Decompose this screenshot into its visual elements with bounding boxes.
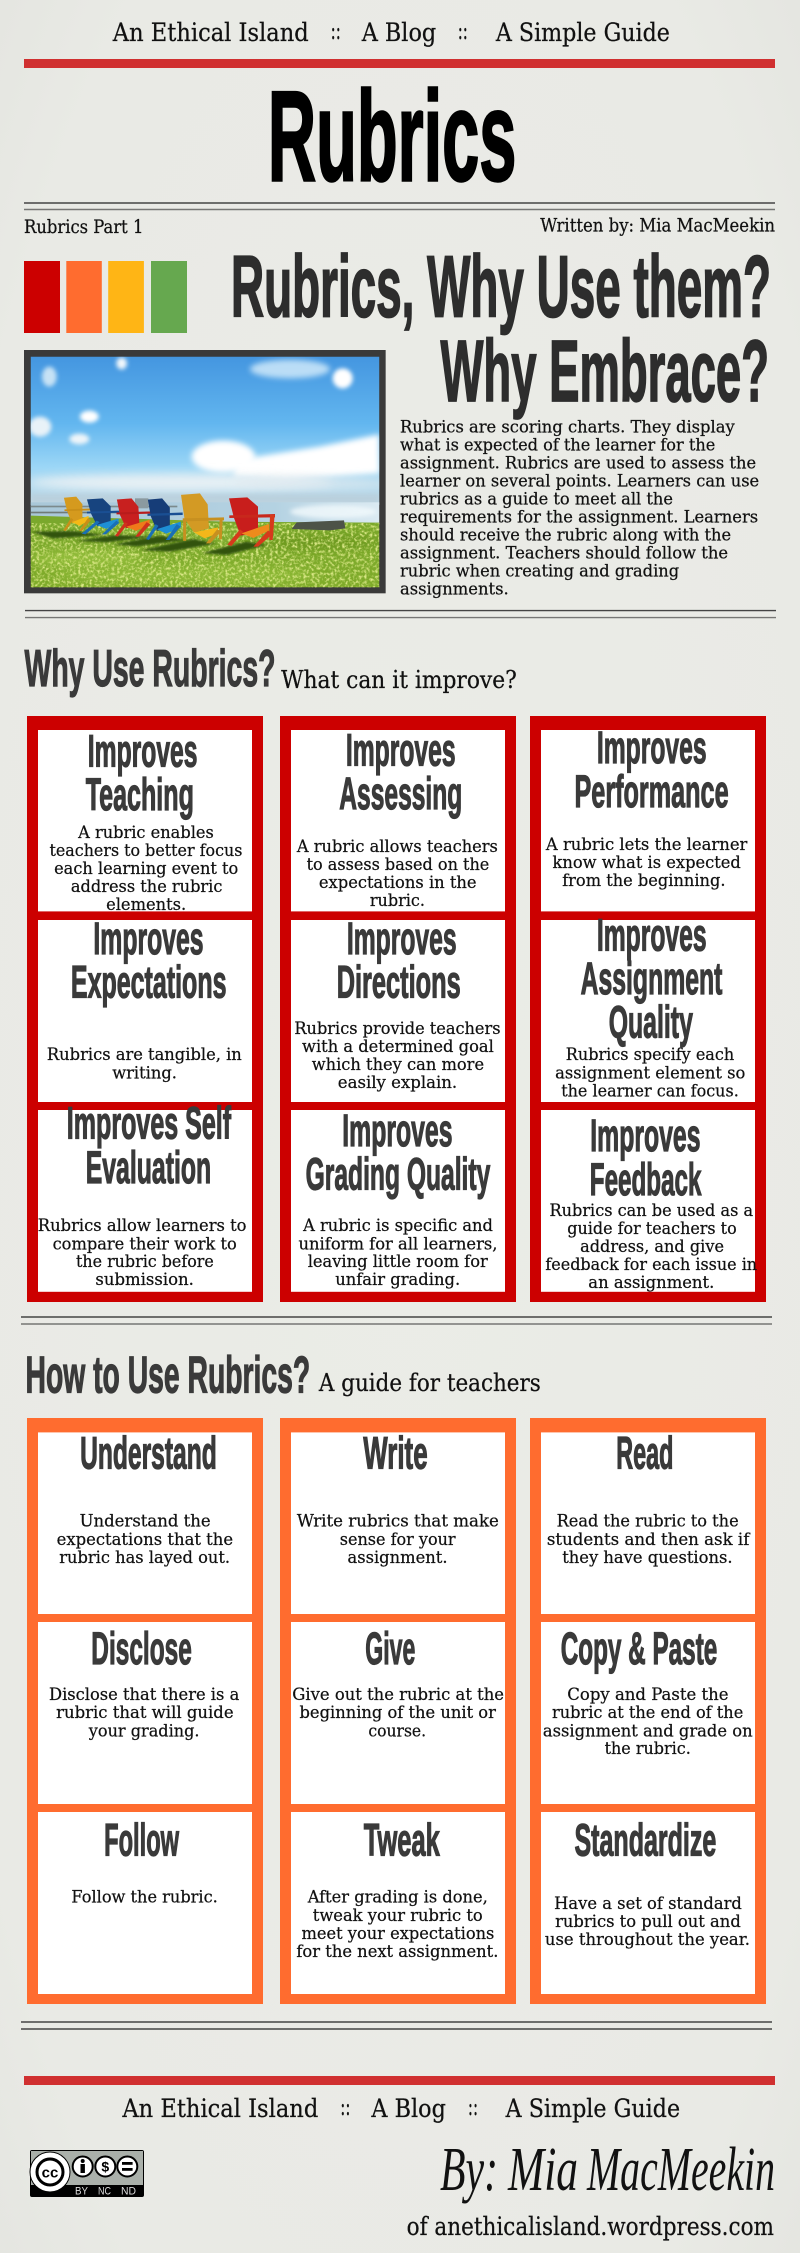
card: read: Read: [616, 1428, 673, 1479]
card: improves assessing: Improves: [346, 724, 456, 775]
card: improves self evaluation: compare their work to: [53, 1234, 237, 1254]
top tagline: A Simple Guide: [495, 18, 670, 47]
card: understand: Understand the: [80, 1512, 211, 1532]
chair 1: yellow: [63, 497, 93, 531]
card: improves assessing: to assess based on the: [307, 855, 489, 875]
card: tweak: tweak your rubric to: [313, 1906, 483, 1926]
card: improves grading quality: A rubric is specific and: [302, 1216, 493, 1236]
section heading: why use rubrics: What can it improve?: [281, 666, 517, 694]
card: disclose: Disclose that there is a: [49, 1685, 239, 1705]
card: improves feedback: an assignment.: [588, 1273, 714, 1293]
card: improves self evaluation: submission.: [95, 1270, 194, 1290]
card: read: they have questions.: [562, 1548, 733, 1568]
card: improves performance: know what is expected: [552, 853, 741, 873]
card: improves performance: A rubric lets the learner: [545, 835, 748, 855]
card: improves assignment quality: assignment element so: [555, 1063, 745, 1083]
signature: by mia macmeekin: Mia: [507, 2136, 578, 2204]
card: improves performance: [541, 722, 755, 911]
icon: creative commons badge: cc: [42, 2164, 58, 2182]
card: understand: [38, 1428, 252, 1614]
card: standardize: use throughout the year.: [545, 1930, 750, 1950]
card: tweak: meet your expectations: [302, 1924, 494, 1944]
card: standardize: rubrics to pull out and: [555, 1912, 741, 1932]
card: improves teaching: elements.: [106, 895, 186, 915]
card: follow: Follow: [104, 1815, 180, 1866]
card: improves feedback: guide for teachers to: [567, 1219, 737, 1239]
card: improves performance: Improves: [597, 722, 707, 773]
card: tweak: After grading is done,: [307, 1888, 488, 1908]
card: improves assignment quality: Quality: [609, 996, 693, 1047]
footer tagline: A Simple Guide: [505, 2094, 680, 2123]
card: disclose: rubric that will guide: [56, 1703, 234, 1723]
card: copy and paste: Copy and Paste the: [567, 1685, 728, 1705]
card: improves expectations: [38, 913, 252, 1102]
section heading: how to use rubrics: How to Use Rubrics?: [26, 1347, 310, 1405]
card: improves teaching: [38, 725, 252, 915]
card: give: beginning of the unit or: [300, 1703, 497, 1723]
card: write: sense for your: [340, 1530, 456, 1550]
card: improves assignment quality: Improves: [597, 909, 707, 960]
card: give: Give out the rubric at the: [292, 1685, 504, 1705]
card: follow: [38, 1812, 252, 1994]
intro paragraph: what is expected of the learner for the: [400, 436, 715, 456]
card: improves self evaluation: Evaluation: [86, 1142, 211, 1193]
signature: by mia macmeekin: By:: [440, 2136, 498, 2204]
top tagline: ::: [458, 16, 468, 45]
intro paragraph: [400, 418, 759, 599]
card: read: [541, 1428, 755, 1614]
card: improves directions: which they can more: [312, 1055, 484, 1075]
footer tagline: An Ethical Island: [121, 2094, 318, 2123]
photo: coloured chairs on a lawn by the sea: [24, 350, 393, 593]
red footer bar: [24, 2076, 775, 2085]
top tagline: ::: [331, 16, 341, 45]
card: improves feedback: feedback for each issue in: [545, 1255, 757, 1275]
intro paragraph: assignment. Rubrics are used to assess the: [400, 454, 756, 474]
section heading: why use rubrics: Why Use Rubrics?: [24, 640, 276, 698]
intro paragraph: requirements for the assignment. Learners: [400, 507, 758, 527]
card: improves directions: easily explain.: [338, 1073, 457, 1093]
card: tweak: [291, 1812, 505, 1994]
card: improves self evaluation: Improves Self: [67, 1098, 232, 1149]
card: write: [291, 1428, 505, 1614]
card: standardize: [541, 1812, 755, 1994]
card: improves grading quality: [291, 1105, 505, 1292]
card: improves performance: from the beginning.: [562, 871, 726, 891]
card: read: students and then ask if: [547, 1530, 751, 1550]
card: understand: Understand: [80, 1428, 217, 1479]
section heading: how to use rubrics: A guide for teachers: [318, 1369, 541, 1397]
icon: creative commons badge: ND: [121, 2186, 136, 2198]
title: Rubrics: [268, 66, 516, 208]
top tagline: [112, 16, 670, 47]
card: improves feedback: address, and give: [580, 1237, 724, 1257]
footer tagline: ::: [468, 2092, 478, 2121]
card: improves grading quality: uniform for all learners,: [298, 1234, 498, 1254]
card: improves assignment quality: [541, 909, 755, 1102]
chair 6: red: [227, 497, 275, 547]
card: improves self evaluation: [38, 1098, 252, 1292]
card: improves assessing: rubric.: [370, 891, 425, 911]
card: give: [291, 1622, 505, 1804]
card: write: Write: [363, 1428, 428, 1479]
card: improves assessing: expectations in the: [319, 873, 477, 893]
intro paragraph: should receive the rubric along with the: [400, 525, 731, 545]
card: improves directions: Directions: [337, 957, 461, 1008]
icon: creative commons badge: $: [101, 2158, 109, 2174]
card: improves assessing: [291, 724, 505, 911]
signature: by mia macmeekin: [440, 2136, 775, 2204]
intro paragraph: rubrics as a guide to meet all the: [400, 490, 673, 510]
chair 5: yellow: [181, 493, 224, 543]
card: improves grading quality: unfair grading.: [335, 1270, 460, 1290]
card: improves grading quality: Improves: [342, 1105, 452, 1156]
card: understand: expectations that the: [57, 1530, 233, 1550]
card: improves directions: with a determined goal: [302, 1037, 494, 1057]
card: improves expectations: Expectations: [71, 957, 227, 1008]
card: improves expectations: Improves: [93, 913, 204, 964]
card: give: Give: [365, 1623, 415, 1674]
card: improves feedback: [541, 1110, 757, 1293]
intro paragraph: assignments.: [400, 579, 509, 599]
intro paragraph: Rubrics are scoring charts. They display: [400, 418, 735, 438]
card: improves expectations: Rubrics are tangible, in: [47, 1045, 242, 1065]
card: improves teaching: each learning event to: [54, 859, 238, 879]
card: improves teaching: Improves: [88, 725, 198, 776]
card: improves feedback: Rubrics can be used as a: [550, 1201, 753, 1221]
card: improves assignment quality: Rubrics specify each: [566, 1045, 734, 1065]
card: improves assessing: Assessing: [339, 768, 462, 819]
card: copy and paste: [541, 1622, 755, 1804]
red header bar: [24, 59, 775, 68]
icon: creative commons badge: NC: [98, 2186, 111, 2198]
card: improves assignment quality: the learner can focus.: [561, 1081, 739, 1101]
card: write: assignment.: [348, 1548, 448, 1568]
card: tweak: for the next assignment.: [296, 1942, 498, 1962]
card: standardize: Have a set of standard: [554, 1894, 742, 1914]
card: disclose: [38, 1622, 252, 1804]
footer tagline: ::: [340, 2092, 350, 2121]
icon: creative commons badge: [30, 2150, 144, 2198]
subheading: part label: Rubrics Part 1: [24, 216, 143, 238]
intro paragraph: rubric when creating and grading: [400, 561, 679, 581]
card: improves grading quality: leaving little room for: [308, 1252, 489, 1272]
card: copy and paste: assignment and grade on: [543, 1721, 753, 1741]
card: improves teaching: Teaching: [86, 769, 194, 820]
panel: what rubrics improve (red cards): [27, 716, 766, 1302]
card: improves grading quality: Grading Quality: [306, 1149, 490, 1200]
footer tagline: [121, 2092, 680, 2123]
card: improves directions: [291, 913, 505, 1102]
headline: [231, 238, 771, 420]
card: improves expectations: writing.: [112, 1063, 177, 1083]
card: understand: rubric has layed out.: [59, 1548, 230, 1568]
chair 3: red: [115, 498, 153, 537]
card: improves assessing: A rubric allows teachers: [296, 837, 498, 857]
icon: creative commons badge: BY: [75, 2186, 89, 2198]
card: improves teaching: address the rubric: [71, 877, 222, 897]
card: improves self evaluation: Rubrics allow learners to: [38, 1216, 246, 1236]
card: follow: Follow the rubric.: [71, 1888, 218, 1908]
card: copy and paste: the rubric.: [605, 1739, 691, 1759]
card: improves feedback: Improves: [590, 1110, 700, 1161]
panel: guide for teachers (orange cards): [27, 1418, 766, 2004]
chair 4: blue: [146, 498, 183, 540]
intro paragraph: learner on several points. Learners can use: [400, 472, 759, 492]
card: improves teaching: teachers to better focus: [50, 841, 242, 861]
card: improves self evaluation: the rubric before: [76, 1252, 214, 1272]
footer tagline: A Blog: [371, 2094, 446, 2123]
card: improves directions: Rubrics provide teachers: [294, 1019, 500, 1039]
card: tweak: Tweak: [364, 1815, 440, 1866]
card: write: Write rubrics that make: [297, 1512, 499, 1532]
chair 2: blue: [82, 498, 119, 534]
card: read: Read the rubric to the: [557, 1512, 739, 1532]
card: copy and paste: rubric at the end of the: [552, 1703, 743, 1723]
card: give: course.: [368, 1721, 426, 1741]
card: improves teaching: A rubric enables: [77, 823, 214, 843]
top tagline: A Blog: [361, 18, 436, 47]
card: improves feedback: Feedback: [590, 1154, 702, 1205]
intro paragraph: assignment. Teachers should follow the: [400, 543, 728, 563]
top tagline: An Ethical Island: [112, 18, 309, 47]
card: disclose: Disclose: [91, 1623, 192, 1674]
card: disclose: your grading.: [88, 1721, 200, 1741]
card: improves directions: Improves: [347, 913, 457, 964]
colour swatches: [24, 261, 187, 333]
